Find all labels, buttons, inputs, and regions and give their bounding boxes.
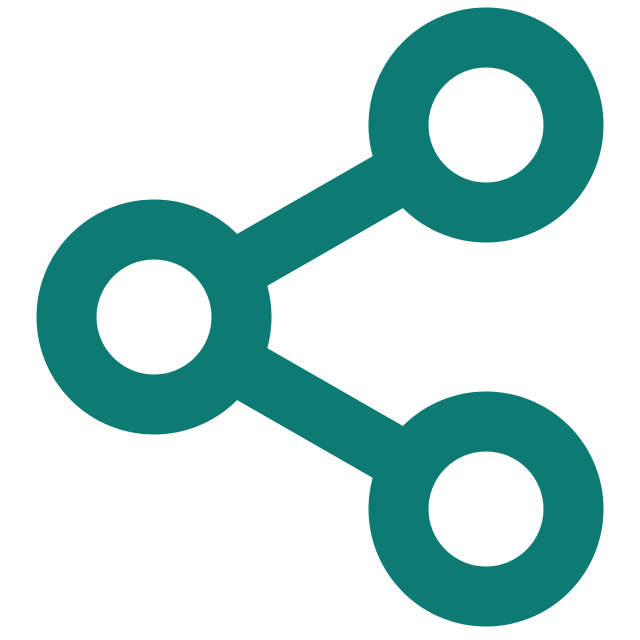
node: bottom right ring: [398, 422, 574, 596]
connector: lower link: [237, 348, 403, 478]
node: top right ring: [398, 38, 574, 212]
connector: upper link: [237, 156, 403, 286]
node: left ring: [66, 230, 242, 404]
